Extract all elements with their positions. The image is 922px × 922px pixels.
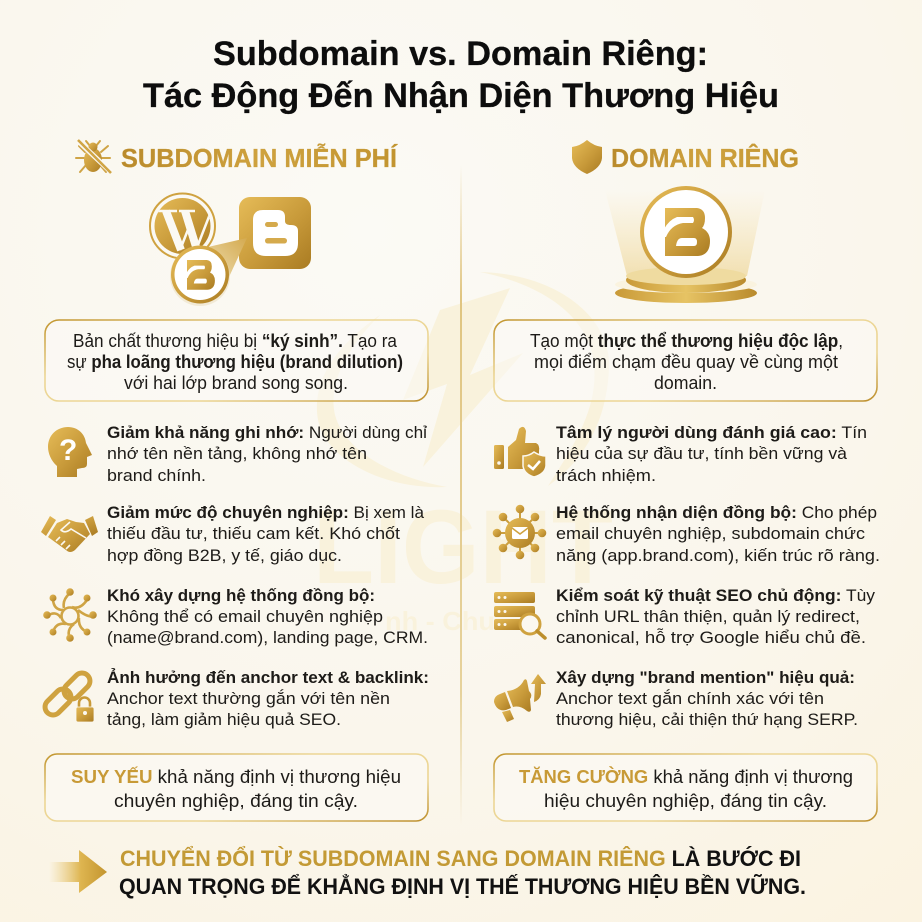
item: anchor text <box>42 668 429 729</box>
item: identity system: Hệ thống nhận diện đồng bộ: Cho phép <box>556 503 877 522</box>
item: identity system <box>493 503 880 565</box>
arrow <box>49 850 107 893</box>
icon: tangled network <box>43 588 97 642</box>
icon: platforms and brand <box>150 194 311 306</box>
item: brand mention <box>494 668 858 729</box>
item: anchor text: Ảnh hưởng đến anchor text & backlink: <box>107 668 429 687</box>
title <box>143 35 779 115</box>
callout: independent brand: Tạo một thực thể thương hiệu độc lập, <box>530 330 843 351</box>
callout: weaken <box>45 754 428 821</box>
item: anchor text: tảng, làm giảm hiệu quả SEO. <box>107 710 341 729</box>
center divider <box>460 165 462 825</box>
watermark logo: nh - Chu <box>385 606 495 636</box>
item: professionalism: thiếu đầu tư, thiếu cam kết. Khó chốt <box>107 524 400 543</box>
icon: head question: ? <box>59 434 77 467</box>
callout: weaken: SUY YẾU khả năng định vị thương hiệu <box>71 766 401 787</box>
icon: crossed bug <box>76 140 111 173</box>
title: Subdomain vs. Domain Riêng: <box>213 35 708 73</box>
item: professionalism: hợp đồng B2B, y tế, giáo dục. <box>107 546 342 565</box>
panel: domain <box>493 140 880 821</box>
callout: strengthen: hiệu chuyên nghiệp, đáng tin cậy. <box>544 790 827 811</box>
item: seo control: chỉnh URL thân thiện, quản lý redirect, <box>556 607 860 626</box>
title: Tác Động Đến Nhận Diện Thương Hiệu <box>143 77 779 115</box>
item: professionalism: Giảm mức độ chuyên nghiệp: Bị xem là <box>107 503 425 522</box>
icon: shield <box>572 140 602 174</box>
beam <box>208 238 247 277</box>
icon: handshake <box>41 516 98 552</box>
item: brand mention: thương hiệu, cải thiện thứ hạng SERP. <box>556 710 858 729</box>
callout: strengthen: TĂNG CƯỜNG khả năng định vị thương <box>519 766 853 787</box>
item: brand mention: Anchor text gắn chính xác với tên <box>556 689 824 708</box>
item: trust <box>494 423 867 485</box>
callout: brand nature: với hai lớp brand song song. <box>124 372 348 393</box>
conclusion <box>49 846 806 899</box>
icon: blogger <box>239 197 311 269</box>
conclusion text <box>119 846 806 899</box>
item: seo control: canonical, hỗ trợ Google hiểu chủ đề. <box>556 628 866 647</box>
icon: thumbs up shield <box>494 427 546 477</box>
icon: mail network <box>493 505 546 559</box>
conclusion text: CHUYỂN ĐỔI TỪ SUBDOMAIN SANG DOMAIN RIÊNG LÀ BƯỚC ĐI <box>120 846 801 871</box>
item: trust: trách nhiệm. <box>556 466 656 485</box>
icon: server magnifier <box>494 592 545 638</box>
item: memory: brand chính. <box>107 466 206 485</box>
item: memory: nhớ tên nền tảng, không nhớ tên <box>107 444 367 463</box>
callout: strengthen <box>494 754 877 821</box>
item: memory <box>48 423 427 485</box>
callout: brand nature: sự pha loãng thương hiệu (brand dilution) <box>67 351 403 372</box>
item: trust: hiệu của sự đầu tư, tính bền vững và <box>556 444 848 463</box>
item: identity system: năng (app.brand.com), kiến trúc rõ ràng. <box>556 546 880 565</box>
callout: brand nature: Bản chất thương hiệu bị “ký sinh”. Tạo ra <box>73 330 398 351</box>
panel: subdomain <box>41 140 429 821</box>
watermark logo: LIGHT <box>313 489 613 606</box>
item: seo control <box>494 586 876 647</box>
icon: wordpress <box>150 194 215 258</box>
item: trust: Tâm lý người dùng đánh giá cao: Tín <box>556 423 867 442</box>
item: system: (name@brand.com), landing page, CRM. <box>107 628 428 647</box>
item: memory: Giảm khả năng ghi nhớ: Người dùng chỉ <box>107 423 427 442</box>
item: professionalism <box>41 503 425 565</box>
heading: subdomain: SUBDOMAIN MIỄN PHÍ <box>121 143 398 173</box>
icon: megaphone <box>494 674 546 722</box>
callout: independent brand <box>494 320 877 401</box>
callout: independent brand: mọi điểm chạm đều quay về cùng một <box>534 351 838 372</box>
item: seo control: Kiểm soát kỹ thuật SEO chủ động: Tùy <box>556 586 876 605</box>
conclusion text: QUAN TRỌNG ĐỂ KHẲNG ĐỊNH VỊ THẾ THƯƠNG HIỆU BỀN VỮNG. <box>119 874 806 899</box>
icon: chain and lock <box>42 670 94 722</box>
callout: brand nature <box>45 320 428 401</box>
item: brand mention: Xây dựng "brand mention" hiệu quả: <box>556 668 855 687</box>
watermark logo <box>313 272 613 636</box>
item: anchor text: Anchor text thường gắn với tên nền <box>107 689 390 708</box>
item: system: Khó xây dựng hệ thống đồng bộ: <box>107 586 375 605</box>
item: system: Không thể có email chuyên nghiệp <box>107 607 383 626</box>
icon: small brand badge <box>170 246 230 306</box>
heading: domain: DOMAIN RIÊNG <box>611 143 799 173</box>
item: identity system: email chuyên nghiệp, subdomain chức <box>556 524 866 543</box>
callout: weaken: chuyên nghiệp, đáng tin cậy. <box>114 790 358 811</box>
icon: brand on podium <box>605 186 765 303</box>
item: system <box>43 586 428 647</box>
icon: head question <box>48 427 92 477</box>
callout: independent brand: domain. <box>654 372 717 393</box>
